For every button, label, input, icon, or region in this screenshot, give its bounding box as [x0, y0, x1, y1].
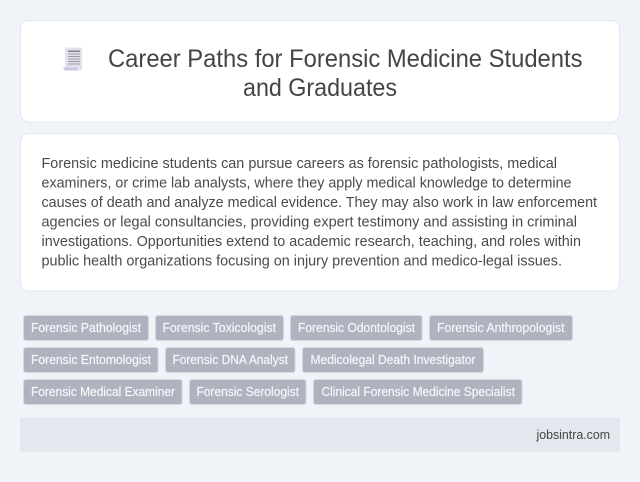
tag: Forensic Entomologist: Forensic Entomologist	[31, 353, 152, 367]
description text: investigations. Opportunities extend to academic research, teaching, and roles within	[42, 233, 581, 250]
tag: Medicolegal Death Investigator: Medicolegal Death Investigator	[310, 353, 476, 367]
tag: Forensic Pathologist: Forensic Pathologist	[31, 321, 141, 335]
tag: Forensic DNA Analyst: Forensic DNA Analyst	[172, 353, 288, 367]
icon: document scroll	[63, 48, 82, 70]
description text: examiners, or crime lab analysts, where they apply medical knowledge to determine	[42, 174, 572, 192]
footer source text: jobsintra.com	[536, 428, 610, 442]
tag: Forensic Medical Examiner	[24, 380, 182, 404]
tag: Forensic Toxicologist: Forensic Toxicologist	[162, 321, 277, 335]
description text	[42, 155, 598, 270]
tag: Forensic Pathologist	[24, 316, 148, 340]
tag: Clinical Forensic Medicine Specialist: Clinical Forensic Medicine Specialist	[322, 385, 515, 399]
description text: causes of death and analyze medical evidence. They may also work in law enforcement	[42, 194, 598, 211]
career tags	[24, 316, 572, 404]
title: and Graduates	[243, 74, 397, 102]
header panel	[20, 20, 620, 122]
tag: Forensic Anthropologist	[430, 316, 572, 340]
tag: Forensic Odontologist: Forensic Odontologist	[298, 321, 416, 335]
tag: Medicolegal Death Investigator	[302, 348, 484, 372]
tag: Forensic Serologist	[190, 380, 306, 404]
tag: Forensic Serologist: Forensic Serologist	[196, 385, 299, 399]
tag: Clinical Forensic Medicine Specialist	[314, 380, 522, 404]
description text: public health organizations focusing on injury prevention and medico-legal issues.	[42, 252, 562, 270]
tag: Forensic Toxicologist	[156, 316, 284, 340]
tag: Forensic Medical Examiner: Forensic Medical Examiner	[31, 385, 175, 399]
panel: description	[20, 134, 620, 291]
footer	[20, 418, 620, 452]
tag: Forensic Odontologist	[290, 316, 422, 340]
tag: Forensic Anthropologist: Forensic Anthropologist	[437, 321, 565, 335]
description text: agencies or legal consultancies, providing expert testimony and assisting in criminal	[42, 214, 577, 230]
tag: Forensic Entomologist	[24, 348, 158, 372]
description text: Forensic medicine students can pursue careers as forensic pathologists, medical	[42, 155, 557, 172]
tag: Forensic DNA Analyst	[166, 348, 295, 372]
title	[108, 45, 582, 102]
title: Career Paths for Forensic Medicine Students	[108, 45, 582, 73]
